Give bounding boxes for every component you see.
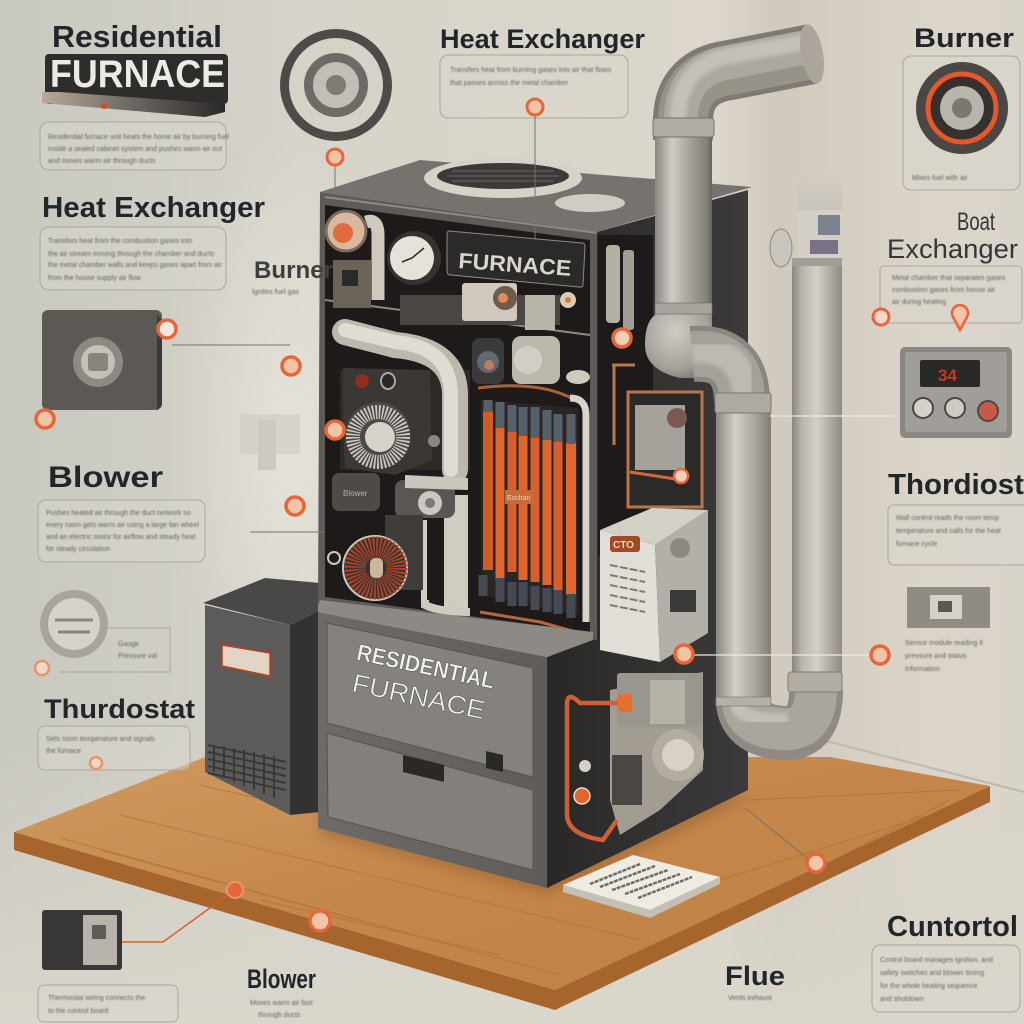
bottom elbow	[736, 690, 816, 733]
manual booklet	[563, 855, 720, 918]
heading: heat exchanger left: Heat Exchanger	[42, 192, 265, 224]
callout: thermostat right: Wall control reads the room temp	[896, 515, 999, 522]
collar	[653, 118, 714, 137]
marker	[871, 646, 889, 664]
upper vertical	[655, 135, 712, 307]
callout: blower left: for steady circulation	[46, 546, 110, 553]
marker	[674, 469, 688, 483]
lower drawer	[327, 733, 533, 870]
callout: thermostat right	[888, 505, 1024, 565]
leader: floor marker	[745, 808, 812, 862]
furnace upper cabinet	[318, 158, 752, 888]
leader: blower	[250, 531, 325, 533]
callout: heat exchanger left: Transfers heat from the combustion gases into	[48, 238, 192, 245]
leader: device	[122, 892, 232, 942]
bulb elbow	[645, 300, 712, 378]
icon: dial gauge	[40, 590, 108, 658]
pressure gauge	[387, 231, 441, 285]
main white pipe	[345, 330, 470, 612]
furnace plaque: FURNACE	[50, 53, 225, 96]
marker	[90, 757, 102, 769]
collar mid	[655, 303, 712, 314]
icon: faint bracket	[240, 414, 300, 470]
top left dial with pipe	[326, 211, 378, 308]
leader: control box	[172, 344, 290, 346]
callout: blower left: every room gets warm air using a large fan wheel	[46, 522, 199, 529]
callout: heat exchanger right	[880, 266, 1022, 323]
callout: heat exchanger top: that passes across the metal chamber	[450, 80, 569, 87]
small latch	[486, 751, 503, 772]
base top edge	[318, 600, 593, 657]
callout: residential furnace description: and moves warm air through ducts	[48, 158, 156, 165]
heading: blower bottom: Blower	[247, 964, 316, 994]
icon: thermostat panel: 34	[938, 366, 957, 385]
residential label: FURNACE	[350, 668, 488, 725]
callout: control: for the whole heating sequence	[880, 983, 977, 990]
title block	[42, 19, 228, 117]
cabinet right side	[547, 190, 748, 888]
leader: top left	[334, 165, 336, 195]
callout: heat exchanger left: the air stream moving through the chamber and ducts	[48, 251, 215, 258]
callout: heat exchanger left: the metal chamber walls and keeps gases apart from air	[48, 262, 223, 269]
callout: thermostat left: the furnace	[46, 748, 81, 755]
caption: device right	[905, 640, 983, 673]
icon: wall bracket	[770, 229, 792, 267]
callout: gauge note: Pressure val	[118, 653, 157, 660]
furnace sign	[447, 231, 585, 287]
right side panel components	[598, 235, 702, 555]
callout: thermostat right: furnace cycle	[896, 541, 937, 548]
marker	[227, 882, 243, 898]
marker	[158, 320, 176, 338]
motor box	[332, 473, 468, 518]
callout: heat exchanger right: air during heating	[892, 299, 946, 306]
caption: blower bottom: through ducts	[258, 1012, 301, 1019]
white control box	[600, 508, 708, 662]
leader: top center	[534, 115, 536, 240]
side cabinet unit	[203, 578, 320, 815]
cabinet interior	[325, 205, 590, 632]
callout: device note	[38, 985, 178, 1022]
heading: heat exchanger right: Boat	[957, 208, 995, 236]
callout: heat exchanger top: Transfers heat from burning gases into air that flows	[450, 67, 612, 74]
marker	[327, 149, 343, 165]
heading: burner left: Burner	[254, 257, 333, 284]
marker	[675, 645, 693, 663]
callout: thermostat left	[38, 726, 190, 770]
marker	[326, 421, 344, 439]
icon: wall control device	[42, 910, 122, 970]
vent on top	[424, 158, 582, 198]
heading: thermostat right: Thordiost	[888, 469, 1024, 501]
callout: heat exchanger right: combustion gases from house air	[892, 287, 996, 294]
marker	[807, 854, 825, 872]
base front	[318, 612, 547, 888]
marker	[310, 911, 330, 931]
marker	[35, 661, 49, 675]
flue pipe	[645, 23, 842, 733]
right elbow	[692, 350, 746, 402]
heading: heat exchanger right	[887, 208, 1018, 264]
upper elbow	[678, 23, 828, 140]
callout: residential furnace description: inside a sealed cabinet system and pushes warm air out	[48, 146, 222, 153]
callout: heat exchanger left: from the house supply air flow	[48, 275, 142, 282]
caption: burner left: Ignites fuel gas	[252, 289, 300, 296]
drawer handle	[403, 755, 444, 782]
caption: device right: Sensor module reading it	[905, 640, 983, 647]
panel: burner icon	[903, 56, 1020, 190]
white control box: CTO	[613, 540, 634, 551]
caption: device right: information	[905, 666, 940, 673]
callout: heat exchanger left	[40, 227, 226, 290]
callout: blower left: Pushes heated air through the duct network so	[46, 510, 191, 517]
marker	[613, 329, 631, 347]
callout: gauge note: Gauge	[118, 641, 139, 648]
lower right burner assembly	[567, 672, 704, 840]
marker	[873, 309, 889, 325]
upper blower fan	[343, 368, 440, 475]
icon: thermostat panel	[900, 347, 1012, 438]
residential label	[348, 639, 497, 726]
heading: blower left: Blower	[48, 461, 163, 494]
callout: heat exchanger right: Metal chamber that separates gases	[892, 275, 1006, 282]
callout: control: and shutdown	[880, 996, 924, 1003]
cabinet front frame	[318, 192, 597, 640]
panel: burner icon: Mixes fuel with air	[912, 175, 968, 182]
marker	[527, 99, 543, 115]
leader: thermostat panel	[770, 415, 895, 417]
heading: heat exchanger right: Exchanger	[887, 234, 1018, 264]
callout: blower left	[38, 500, 205, 562]
furnace base	[318, 600, 593, 888]
heading: control: Cuntortol	[887, 911, 1018, 943]
callout: gauge note	[60, 628, 170, 672]
caption: blower bottom: Moves warm air fast	[250, 1000, 313, 1007]
lower vertical	[716, 410, 771, 702]
upper drawer	[327, 623, 533, 777]
caption: flue: Vents exhaust	[728, 995, 772, 1002]
callout: control	[872, 945, 1020, 1012]
callout: thermostat right: temperature and calls for the heat	[896, 528, 1001, 535]
wall pipe	[792, 170, 842, 692]
residential label: RESIDENTIAL	[355, 639, 497, 694]
callout: residential furnace description	[40, 122, 229, 170]
callout: control: safety switches and blower timing	[880, 970, 984, 977]
leader: right marker	[690, 654, 872, 656]
heading: burner right: Burner	[914, 23, 1015, 53]
collar low	[715, 393, 771, 413]
heading: heat exchanger top: Heat Exchanger	[440, 24, 645, 54]
heat exchanger tubes: Exchan	[507, 495, 530, 502]
wooden floor platform	[14, 757, 990, 1010]
control valves	[462, 283, 590, 384]
marker	[36, 410, 54, 428]
furnace sign: FURNACE	[458, 248, 572, 281]
furnace plaque	[42, 53, 228, 117]
caption: device right: pressure and status	[905, 653, 967, 660]
callout: residential furnace description: Residential furnace unit heats the home air by burning fuel	[48, 134, 229, 141]
lower blower fan	[328, 515, 423, 600]
collars bottom	[716, 672, 842, 706]
callout: heat exchanger top	[440, 55, 628, 118]
callout: device note: Thermostat wiring connects the	[48, 995, 145, 1002]
callout: device note: to the control board	[48, 1008, 108, 1015]
marker	[952, 305, 968, 330]
icon: control box left	[42, 310, 162, 410]
gauge plate on top	[555, 194, 625, 212]
top center gauge icon	[280, 29, 392, 141]
heading: flue: Flue	[725, 961, 785, 991]
callout: control: Control board manages ignition, and	[880, 957, 993, 964]
callout: thermostat left: Sets room temperature and signals	[46, 736, 155, 743]
heading: thermostat left: Thurdostat	[44, 694, 195, 724]
cabinet top face	[320, 160, 752, 232]
title: residential: Residential	[52, 19, 222, 54]
marker	[286, 497, 304, 515]
callout: blower left: and an electric motor for airflow and steady heat	[46, 534, 195, 541]
marker	[282, 357, 300, 375]
icon: small device	[907, 587, 990, 628]
motor box: Blower	[343, 489, 368, 498]
caption: blower bottom	[250, 1000, 313, 1019]
heat exchanger tubes	[478, 386, 590, 636]
